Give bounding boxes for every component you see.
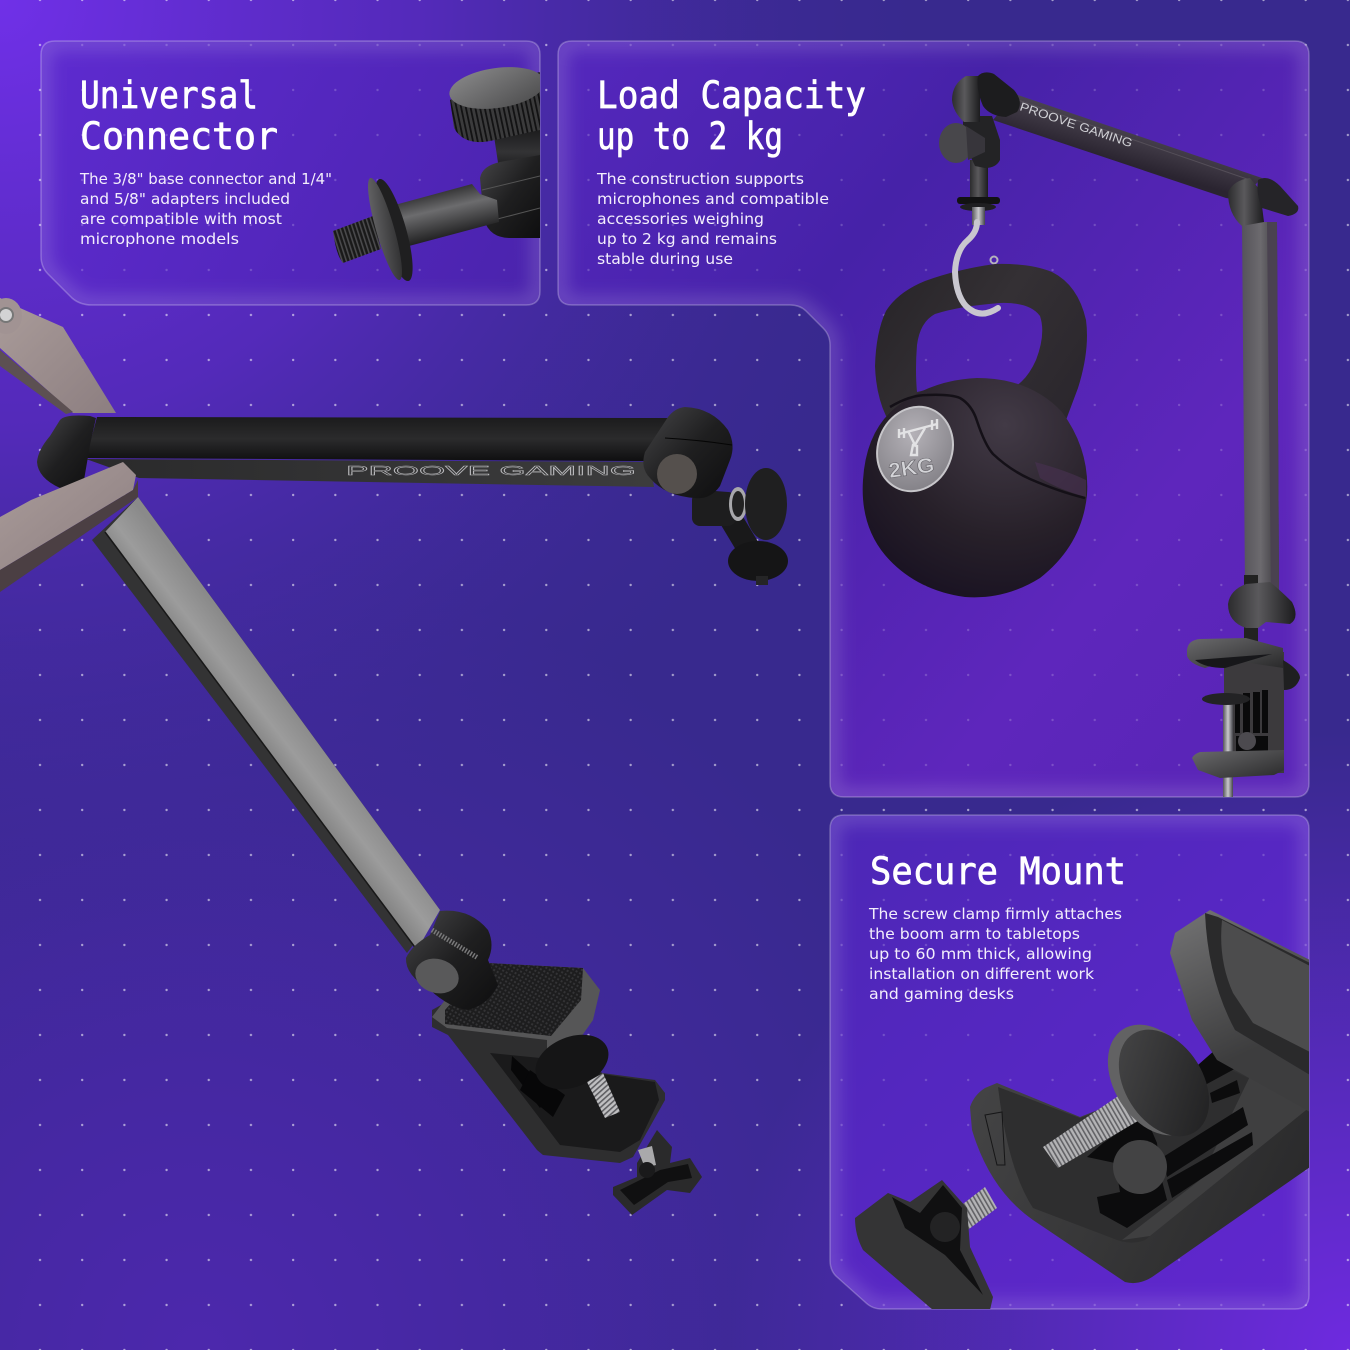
lower arm: [92, 497, 440, 953]
wing knob: [855, 1180, 993, 1310]
image: boom arm stand side view: [863, 72, 1300, 797]
text: load capacity description: The construction supports: [596, 170, 804, 188]
image: boom arm hero product: [0, 298, 788, 1215]
text: load capacity description: stable during use: [597, 250, 733, 268]
panel: secure mount: [830, 815, 1310, 1310]
heading: universal connector: [80, 74, 278, 158]
text: secure mount description: The screw clamp firmly attaches: [868, 905, 1122, 923]
text: load capacity description: up to 2 kg and remains: [597, 230, 777, 248]
clamp body and lower jaw: [970, 1062, 1310, 1283]
left hinge: [37, 416, 96, 488]
text: secure mount description: the boom arm to tabletops: [869, 925, 1080, 943]
heading: universal connector: Universal: [80, 74, 258, 117]
image: screw clamp close-up: [855, 910, 1310, 1310]
heading: secure mount: Secure Mount: [870, 850, 1126, 893]
text: universal connector description: microphone models: [80, 230, 239, 248]
kettlebell weight plate: 2KG: [887, 454, 936, 483]
image: threaded connector with knob: [333, 62, 547, 284]
text: load capacity description: accessories weighing: [597, 210, 764, 228]
upper arm: PROOVE GAMING: [346, 463, 636, 478]
heading: load capacity: [597, 74, 866, 158]
horizontal bar with logo: PROOVE GAMING: [1018, 100, 1134, 150]
hook: [955, 222, 998, 314]
panel: universal connector: [41, 41, 547, 305]
text: secure mount description: installation on different work: [869, 965, 1094, 983]
clamp upper jaw: [1170, 910, 1310, 1112]
panel: load capacity: [558, 41, 1309, 797]
kettlebell: [863, 222, 1087, 597]
text: load capacity description: [596, 170, 829, 268]
heading: load capacity: Load Capacity: [597, 74, 866, 117]
desk clamp hero: [432, 963, 702, 1215]
heading: universal connector: Connector: [80, 115, 278, 158]
text: secure mount description: [868, 905, 1122, 1003]
elbow hinge: [1228, 178, 1298, 226]
desk clamp: [1187, 575, 1300, 797]
heading: load capacity: up to 2 kg: [597, 115, 783, 158]
text: universal connector description: [79, 170, 332, 248]
text: secure mount description: up to 60 mm thick, allowing: [869, 945, 1092, 963]
top hinge and tilt knob: [939, 72, 1020, 225]
text: load capacity description: microphones and compatible: [597, 190, 829, 208]
text: secure mount description: and gaming desks: [869, 985, 1014, 1003]
gripper claws: [0, 298, 116, 414]
clamp back ribs: [1087, 1050, 1253, 1228]
horizontal bar with logo: [993, 94, 1262, 200]
lower elbow: [406, 911, 498, 1010]
text: universal connector description: The 3/8" base connector and 1/4": [79, 170, 332, 188]
upper arm: [86, 417, 668, 487]
screw and pressure disc: [963, 1024, 1209, 1230]
right elbow and mic tilt mount: [643, 407, 788, 585]
kettlebell weight plate: [876, 406, 954, 492]
text: universal connector description: and 5/8" adapters included: [80, 190, 290, 208]
vertical pole: [1242, 222, 1279, 590]
text: universal connector description: are compatible with most: [80, 210, 282, 228]
hero wing knob: [613, 1130, 702, 1215]
